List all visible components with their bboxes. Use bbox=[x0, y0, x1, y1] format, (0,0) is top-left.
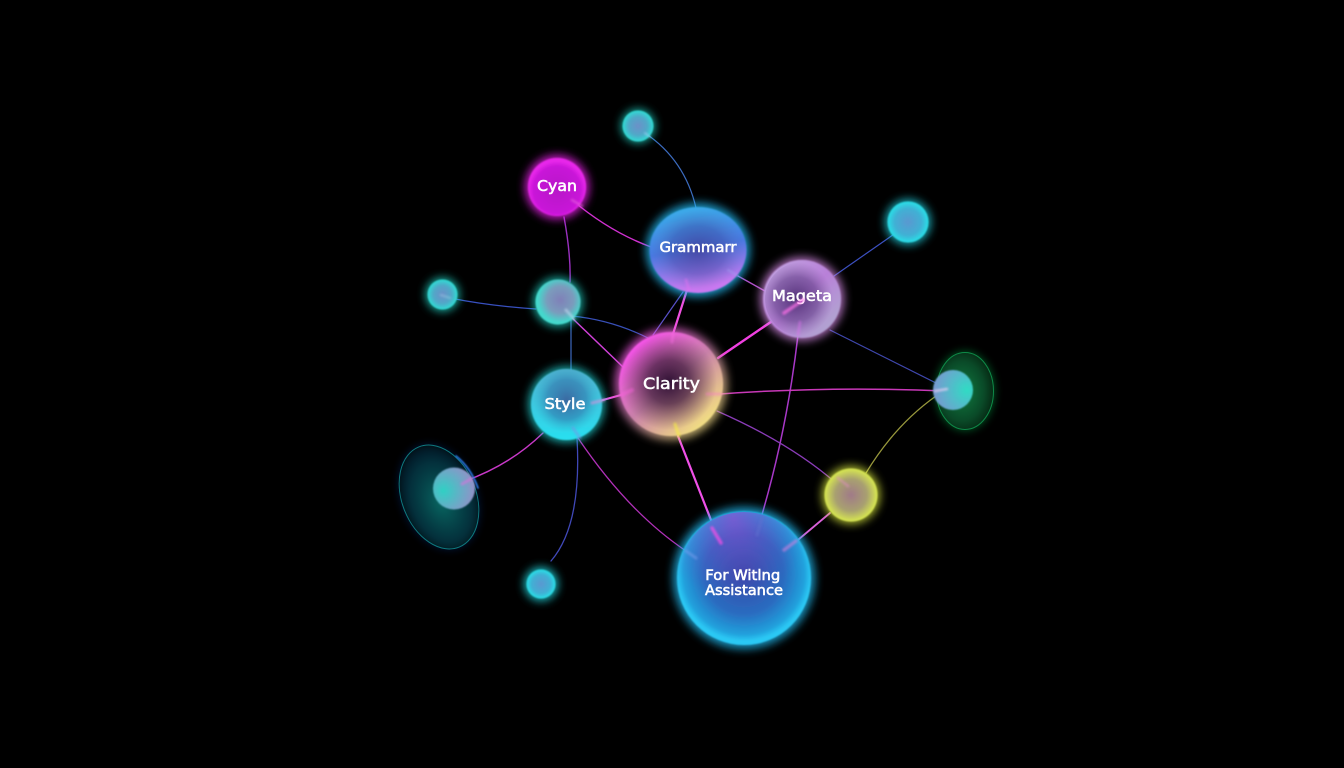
label: Clarity: Clarity bbox=[643, 374, 700, 393]
node: left oval bbox=[384, 433, 494, 561]
node: top right small bbox=[885, 199, 931, 245]
connection highlights bbox=[441, 133, 947, 558]
node: Style bbox=[528, 366, 604, 442]
connections bbox=[450, 133, 945, 561]
label: Mageta: Mageta bbox=[772, 287, 832, 305]
node: middle teal bbox=[533, 277, 583, 327]
node: yellow bbox=[822, 466, 880, 524]
node: left small bbox=[426, 278, 460, 312]
label: For Witlng Assistance: Assistance bbox=[705, 583, 783, 599]
label: Grammarr: Grammarr bbox=[660, 240, 737, 256]
node: Magenta bbox=[760, 257, 844, 341]
node: For Writing Assistance bbox=[673, 507, 815, 649]
label: Cyan: Cyan bbox=[537, 177, 577, 195]
node: top small bbox=[621, 109, 655, 143]
node: right oval bbox=[933, 352, 994, 430]
node: Cyan bbox=[525, 155, 589, 219]
label: For Witlng Assistance: For Witlng bbox=[705, 568, 780, 584]
node: Grammarr bbox=[646, 203, 750, 297]
label: Style: Style bbox=[544, 395, 586, 413]
node: bottom small bbox=[524, 567, 558, 601]
node: Clarity bbox=[615, 328, 727, 440]
